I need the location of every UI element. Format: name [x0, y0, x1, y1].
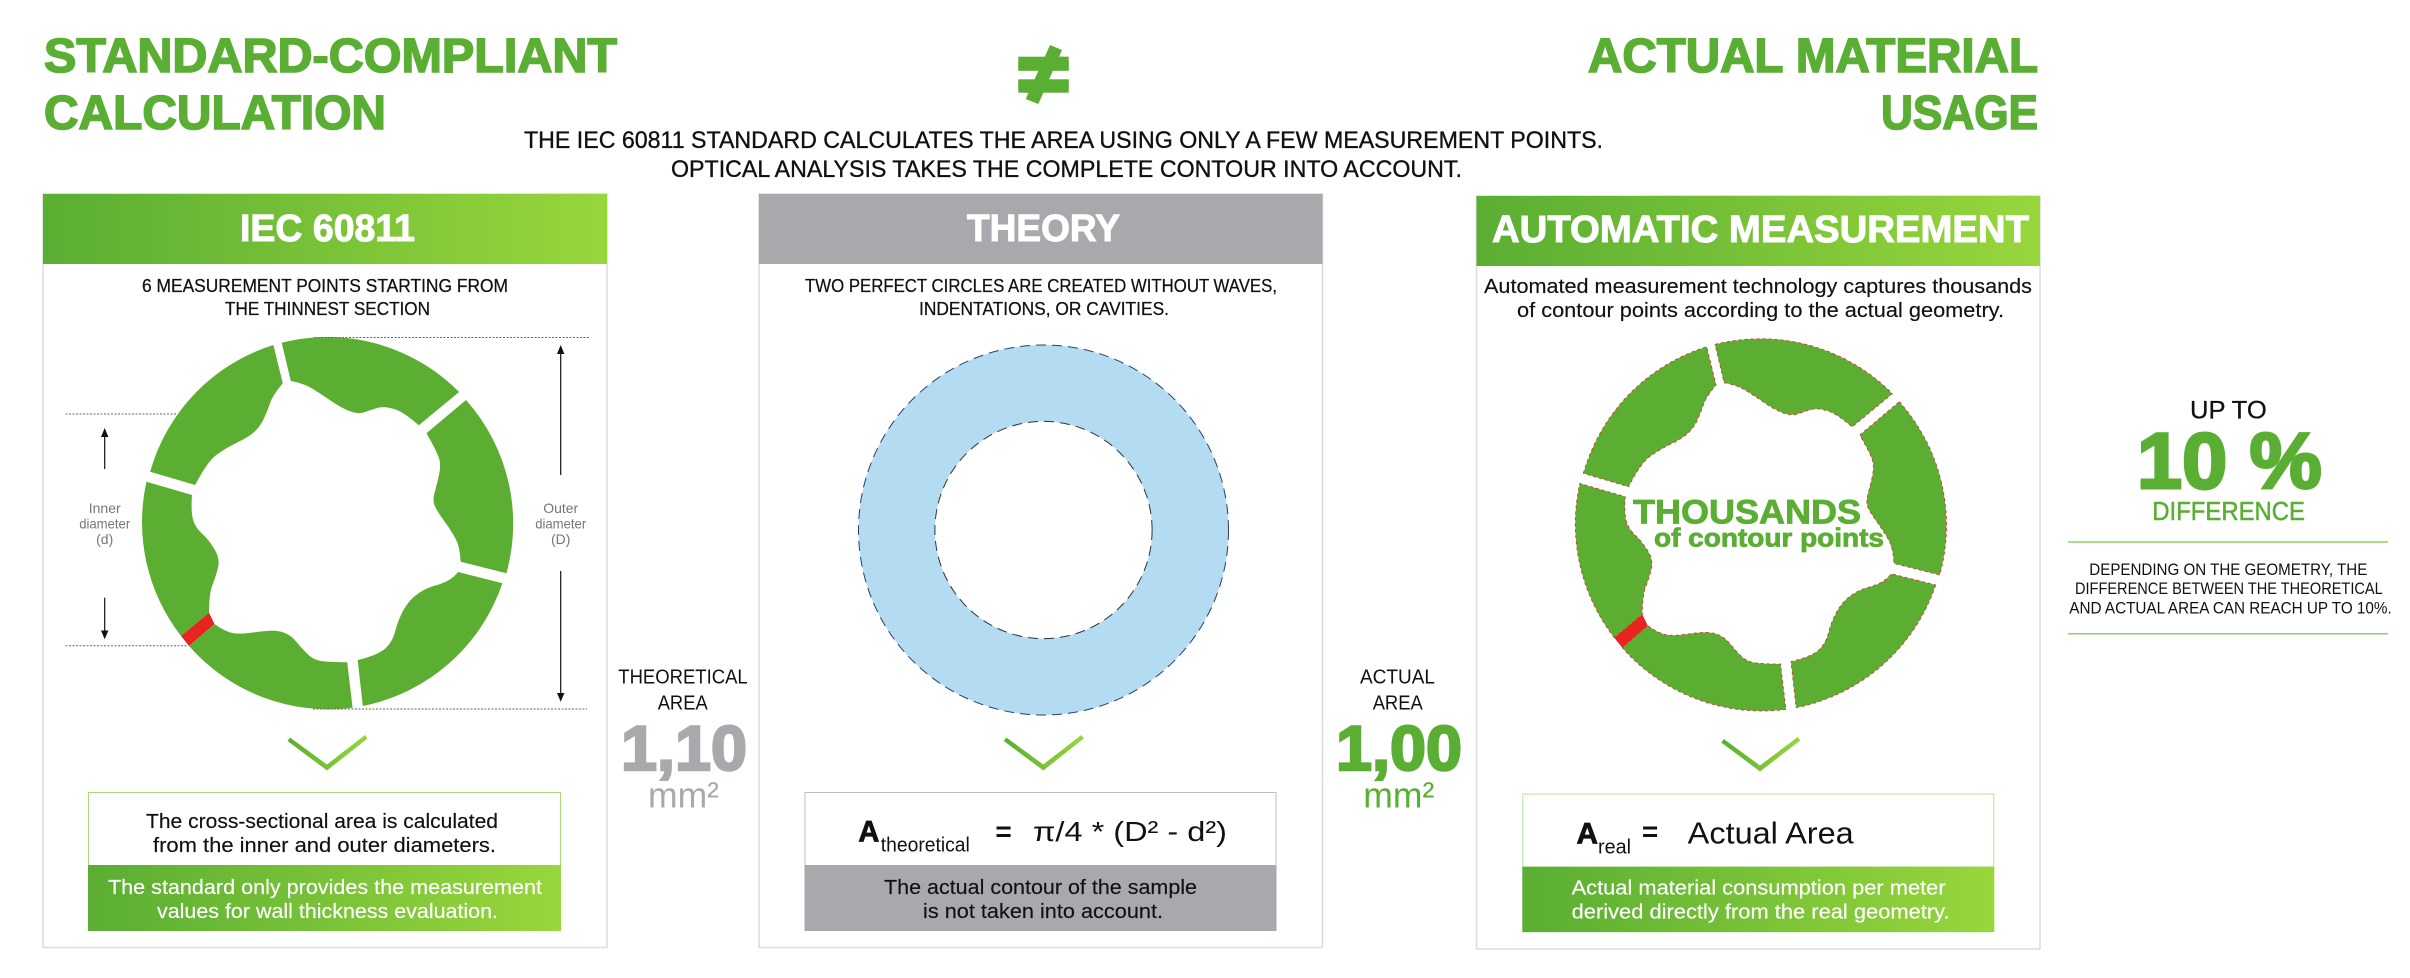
panel: theory [759, 194, 1322, 948]
icon: chevron [1004, 735, 1084, 770]
theoretical area value: mm² [648, 774, 719, 815]
actual area value: ACTUAL [1360, 666, 1435, 688]
callout: up to 10% difference: 10 % [2137, 416, 2322, 505]
panel header: theory: THEORY [967, 208, 1120, 250]
panel header: automatic measurement: AUTOMATIC MEASUREMENT [1492, 209, 2029, 251]
diagram: real contour ring [1575, 339, 1946, 711]
icon: chevron [1721, 737, 1800, 772]
callout: thousands of contour points [1633, 494, 1884, 553]
panel: IEC 60811 [43, 194, 607, 948]
description: measurement points: THE THINNEST SECTION [225, 298, 430, 319]
actual area value: AREA [1373, 692, 1423, 714]
info box: cross-sectional area: The standard only provides the measurement [108, 877, 542, 899]
info box: theoretical formula: is not taken into account. [923, 901, 1163, 923]
actual area value [1336, 666, 1462, 815]
diagram: perfect ring [858, 345, 1228, 715]
intro text: OPTICAL ANALYSIS TAKES THE COMPLETE CONTOUR INTO ACCOUNT. [671, 156, 1462, 183]
theoretical area value [618, 666, 748, 815]
info box: real area: derived directly from the real geometry. [1572, 902, 1950, 924]
description: perfect circles: INDENTATIONS, OR CAVITIES. [919, 298, 1169, 319]
theoretical area value: AREA [658, 692, 708, 714]
info box: real area: Actual material consumption per meter [1572, 878, 1946, 900]
diagram: measured ring with diameters [66, 337, 590, 709]
description: thousands of contour points: of contour points according to the actual geometry. [1517, 300, 2004, 322]
label: outer diameter: diameter [535, 516, 587, 532]
description: measurement points [142, 275, 508, 319]
title: actual material usage [1588, 30, 2038, 140]
info box: real area: real [1598, 836, 1631, 858]
intro text: THE IEC 60811 STANDARD CALCULATES THE AREA USING ONLY A FEW MEASUREMENT POINTS. [524, 127, 1603, 154]
title: standard-compliant calculation [44, 30, 617, 140]
info box: real area: = [1642, 816, 1658, 847]
icon: not equal sign: ≠ [1009, 26, 1078, 121]
info box: real area [1522, 794, 1994, 932]
icon: not equal sign [1018, 45, 1069, 104]
theoretical area value: 1,10 [621, 714, 747, 784]
callout: thousands of contour points: of contour points [1654, 523, 1884, 553]
label: inner diameter: Inner [89, 500, 121, 516]
description: perfect circles [805, 275, 1277, 319]
info box: real area: Actual Area [1688, 815, 1854, 850]
intro text [524, 127, 1603, 183]
title: actual material usage: USAGE [1881, 87, 2038, 140]
panel header: IEC 60811: IEC 60811 [240, 208, 415, 250]
title: actual material usage: ACTUAL MATERIAL [1588, 30, 2038, 83]
actual area value: 1,00 [1336, 714, 1462, 784]
callout: up to 10% difference: DEPENDING ON THE GEOMETRY, THE [2089, 560, 2367, 579]
label: outer diameter [535, 500, 587, 547]
info box: theoretical formula: A [858, 816, 879, 849]
callout: up to 10% difference: UP TO [2190, 396, 2267, 424]
title: standard-compliant calculation: CALCULATION [44, 87, 386, 140]
panel header: IEC 60811 [43, 194, 607, 264]
info box: cross-sectional area: from the inner and outer diameters. [153, 835, 496, 857]
info box: cross-sectional area [88, 792, 561, 931]
info box: theoretical formula: = [995, 816, 1012, 847]
description: perfect circles: TWO PERFECT CIRCLES ARE CREATED WITHOUT WAVES, [805, 275, 1277, 296]
info box: cross-sectional area: The cross-sectional area is calculated [146, 811, 498, 833]
label: outer diameter: (D) [551, 531, 570, 547]
actual area value: mm² [1363, 774, 1434, 815]
theoretical area value: THEORETICAL [618, 666, 748, 688]
info box: real area: A [1576, 817, 1598, 850]
label: inner diameter: diameter [79, 516, 131, 532]
callout: thousands of contour points: THOUSANDS [1633, 494, 1861, 532]
description: thousands of contour points: Automated measurement technology captures thousands [1484, 276, 2032, 298]
info box: theoretical formula: π/4 * (D² - d²) [1033, 816, 1227, 847]
panel header: automatic measurement [1476, 196, 2040, 266]
label: inner diameter [79, 500, 131, 547]
icon: chevron [288, 735, 368, 770]
title: standard-compliant calculation: STANDARD-COMPLIANT [44, 30, 617, 83]
description: measurement points: 6 MEASUREMENT POINTS STARTING FROM [142, 275, 508, 296]
callout: up to 10% difference [2068, 396, 2392, 634]
panel header: theory [759, 194, 1322, 264]
info box: cross-sectional area: values for wall thickness evaluation. [157, 901, 498, 923]
label: outer diameter: Outer [543, 500, 579, 516]
description: thousands of contour points [1484, 276, 2032, 322]
label: inner diameter: (d) [96, 531, 113, 547]
callout: up to 10% difference: DIFFERENCE [2152, 496, 2305, 526]
info box: theoretical formula: The actual contour of the sample [884, 877, 1197, 899]
info box: theoretical formula [804, 792, 1276, 931]
info box: theoretical formula: theoretical [881, 835, 970, 857]
panel: automatic measurement [1476, 196, 2040, 949]
